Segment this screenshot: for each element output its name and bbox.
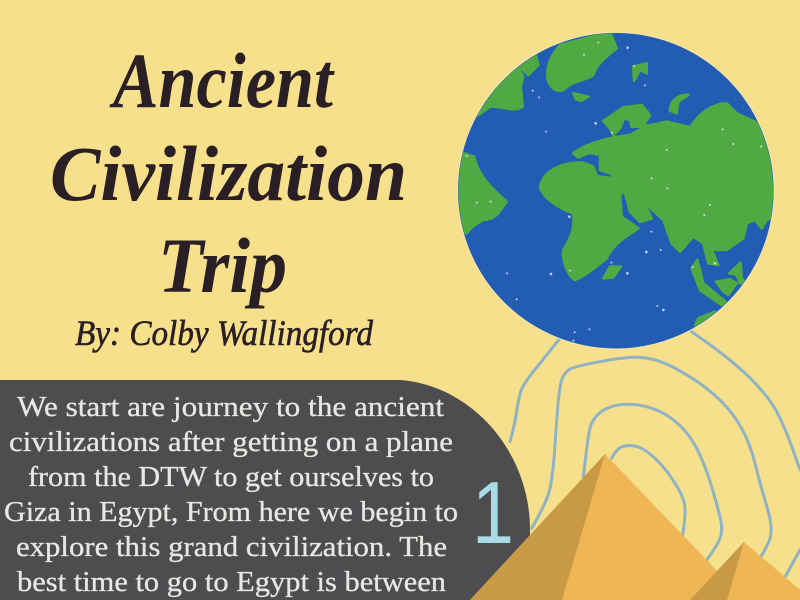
contour lines — [510, 332, 800, 580]
title: Trip — [158, 222, 287, 309]
title — [50, 37, 407, 309]
panel body text — [4, 392, 458, 598]
globe — [453, 32, 778, 349]
icon: large pyramid — [470, 454, 745, 600]
continents — [453, 32, 778, 326]
stars — [466, 42, 762, 342]
panel body text: civilizations after getting on a plane — [9, 427, 453, 458]
panel background — [0, 380, 530, 600]
step number: 1 — [472, 463, 514, 562]
title: Civilization — [50, 130, 407, 217]
panel body text: Giza in Egypt, From here we begin to — [4, 497, 458, 528]
panel body text: from the DTW to get ourselves to — [28, 462, 434, 493]
ocean — [457, 32, 774, 349]
icon: small pyramid — [690, 542, 800, 600]
title: Ancient — [109, 37, 335, 124]
panel body text: best time to go to Egypt is between — [17, 567, 446, 598]
author byline: By: Colby Wallingford — [75, 313, 374, 353]
text panel: journey introduction — [0, 380, 530, 600]
panel body text: We start are journey to the ancient — [17, 392, 444, 423]
panel body text: explore this grand civilization. The — [16, 532, 447, 563]
